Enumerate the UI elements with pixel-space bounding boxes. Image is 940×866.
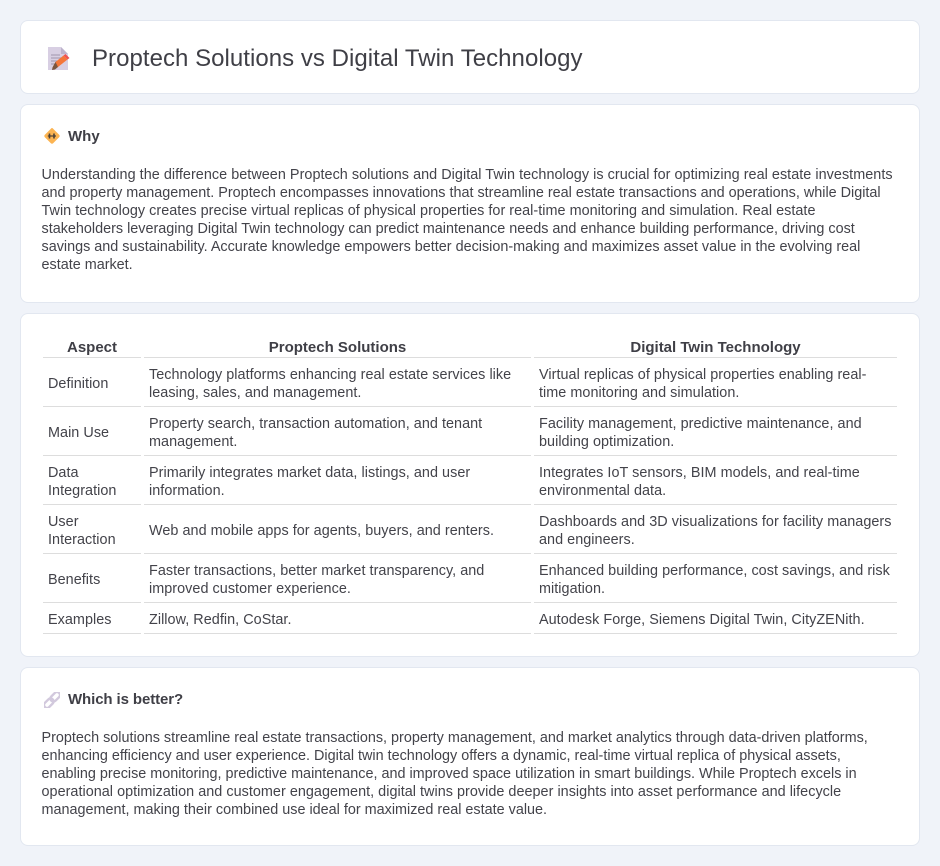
- row: user interaction: User: [48, 514, 79, 530]
- title text: Proptech Solutions vs Digital Twin Technology: [92, 45, 583, 72]
- text block: why: savings and sustainability. Accurate knowledge empowers better decision-making and maximizes asset value in the evolving real: [42, 239, 860, 255]
- text block: why: [42, 167, 893, 273]
- text block: which is better: enhancing efficiency and user experience. Digital twin technology offers a dynamic, real-time virtual replica of physical assets,: [42, 748, 841, 764]
- text block: which is better: enabling precise monitoring, predictive maintenance, and improved space utilization in smart buildings. While Proptech excels in: [42, 766, 857, 782]
- row: user interaction: Interaction: [48, 532, 116, 548]
- row: examples: Zillow, Redfin, CoStar.: [149, 612, 292, 628]
- row: data integration: information.: [149, 483, 225, 499]
- row: main use: Facility management, predictive maintenance, and: [539, 416, 862, 432]
- row: user interaction: Web and mobile apps for agents, buyers, and renters.: [149, 523, 494, 539]
- row: benefits: Enhanced building performance, cost savings, and risk: [539, 563, 890, 579]
- row: benefits: [43, 563, 897, 603]
- row: examples: [43, 612, 897, 634]
- text block: which is better: operational optimization and customer engagement, digital twins provide deeper insights into asset performance and lifecycle: [42, 784, 841, 800]
- table header: proptech solutions: Proptech Solutions: [269, 339, 406, 356]
- row: main use: Property search, transaction automation, and tenant: [149, 416, 482, 432]
- text block: why: Twin technology creates precise virtual replicas of physical properties for real-time monitoring and simulation. Real estate: [42, 203, 815, 219]
- table header: aspect: Aspect: [67, 339, 117, 356]
- table header: aspect: [43, 337, 141, 358]
- row: data integration: Integrates IoT sensors, BIM models, and real-time: [539, 465, 860, 481]
- row: definition: [43, 367, 897, 407]
- table header: proptech solutions: [144, 337, 531, 358]
- row: definition: time monitoring and simulation.: [539, 385, 739, 401]
- row: benefits: Faster transactions, better market transparency, and: [149, 563, 484, 579]
- text block: which is better: [42, 730, 868, 818]
- row: benefits: mitigation.: [539, 581, 605, 597]
- row: user interaction: Dashboards and 3D visualizations for facility managers: [539, 514, 892, 530]
- icon: warning diamond: [44, 128, 60, 144]
- row: examples: Examples: [48, 612, 112, 628]
- panel: which is better: [20, 667, 920, 846]
- table header: digital twin technology: [534, 337, 897, 358]
- panel: why: [20, 104, 920, 303]
- row: benefits: improved customer experience.: [149, 581, 351, 597]
- icon: chain link: [44, 692, 60, 708]
- row: definition: Technology platforms enhancing real estate services like: [149, 367, 511, 383]
- row: examples: Autodesk Forge, Siemens Digital Twin, CityZENith.: [539, 612, 865, 628]
- row: data integration: Primarily integrates market data, listings, and user: [149, 465, 470, 481]
- icon: document with pencil: [48, 47, 70, 70]
- text block: why: Understanding the difference between Proptech solutions and Digital Twin technology is crucial for optimizing real estate investments: [42, 167, 893, 183]
- row: user interaction: [43, 514, 897, 554]
- text block: why: and property management. Proptech encompasses innovations that streamline real estate transactions and operations, while Digital: [42, 185, 881, 201]
- row: main use: management.: [149, 434, 237, 450]
- panel: comparison table: [20, 313, 920, 657]
- row: data integration: Data: [48, 465, 79, 481]
- text block: why: stakeholders leveraging Digital Twin technology can predict maintenance needs and enhance building performance, driving cost: [42, 221, 855, 237]
- row: definition: leasing, sales, and management.: [149, 385, 361, 401]
- text block: which is better: Proptech solutions streamline real estate transactions, property management, and market analytics through data-driven platforms,: [42, 730, 868, 746]
- row: data integration: [43, 465, 897, 505]
- heading: why: Why: [68, 128, 100, 145]
- row: data integration: environmental data.: [539, 483, 666, 499]
- row: user interaction: and engineers.: [539, 532, 635, 548]
- row: benefits: Benefits: [48, 572, 100, 588]
- row: main use: Main Use: [48, 425, 109, 441]
- heading: which is better: Which is better?: [68, 691, 183, 708]
- row: data integration: Integration: [48, 483, 116, 499]
- table header: digital twin technology: Digital Twin Technology: [630, 339, 801, 356]
- row: definition: Definition: [48, 376, 108, 392]
- panel: title: [20, 20, 920, 94]
- row: main use: building optimization.: [539, 434, 674, 450]
- text block: which is better: management, making their combined use ideal for maximized real estate value.: [42, 802, 547, 818]
- row: main use: [43, 416, 897, 456]
- row: definition: Virtual replicas of physical properties enabling real-: [539, 367, 866, 383]
- text block: why: estate market.: [42, 257, 133, 273]
